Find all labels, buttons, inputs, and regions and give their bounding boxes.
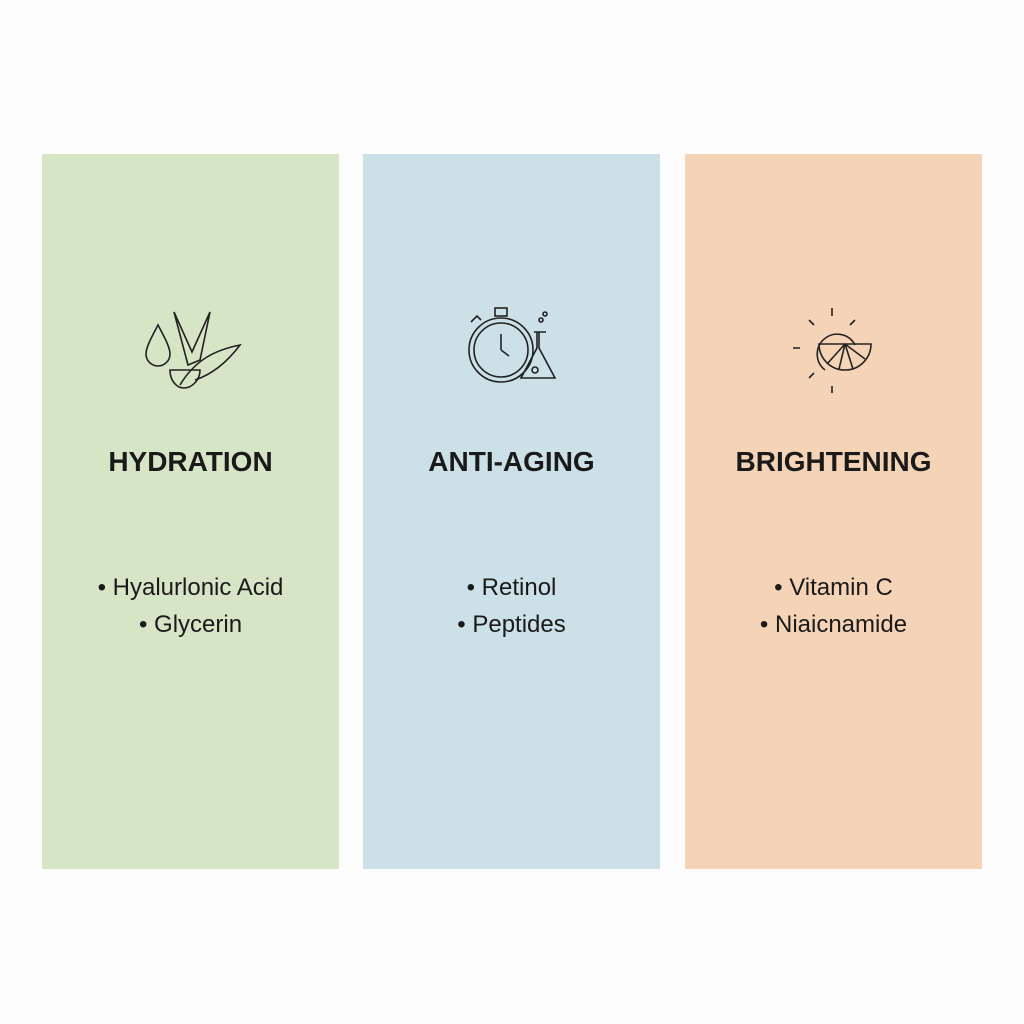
ingredient list (457, 574, 566, 638)
panel: anti-aging (363, 154, 660, 869)
icon: drop and aloe (145, 312, 242, 389)
ingredient list: • Glycerin (139, 611, 242, 638)
icon: sun and citrus (793, 308, 872, 393)
ingredient list: • Vitamin C (774, 574, 893, 601)
panel: hydration (42, 154, 339, 869)
ingredient list (98, 574, 283, 638)
ingredient list: • Hyalurlonic Acid (98, 574, 283, 601)
ingredient list (760, 574, 907, 638)
icon: stopwatch and flask (468, 307, 556, 383)
ingredient list: • Retinol (467, 574, 556, 601)
heading: ANTI-AGING (428, 446, 595, 477)
ingredient list: • Peptides (457, 611, 566, 638)
panel: brightening (685, 154, 982, 869)
heading: HYDRATION (108, 446, 273, 477)
ingredient list: • Niaicnamide (760, 611, 907, 638)
heading: BRIGHTENING (736, 446, 932, 477)
